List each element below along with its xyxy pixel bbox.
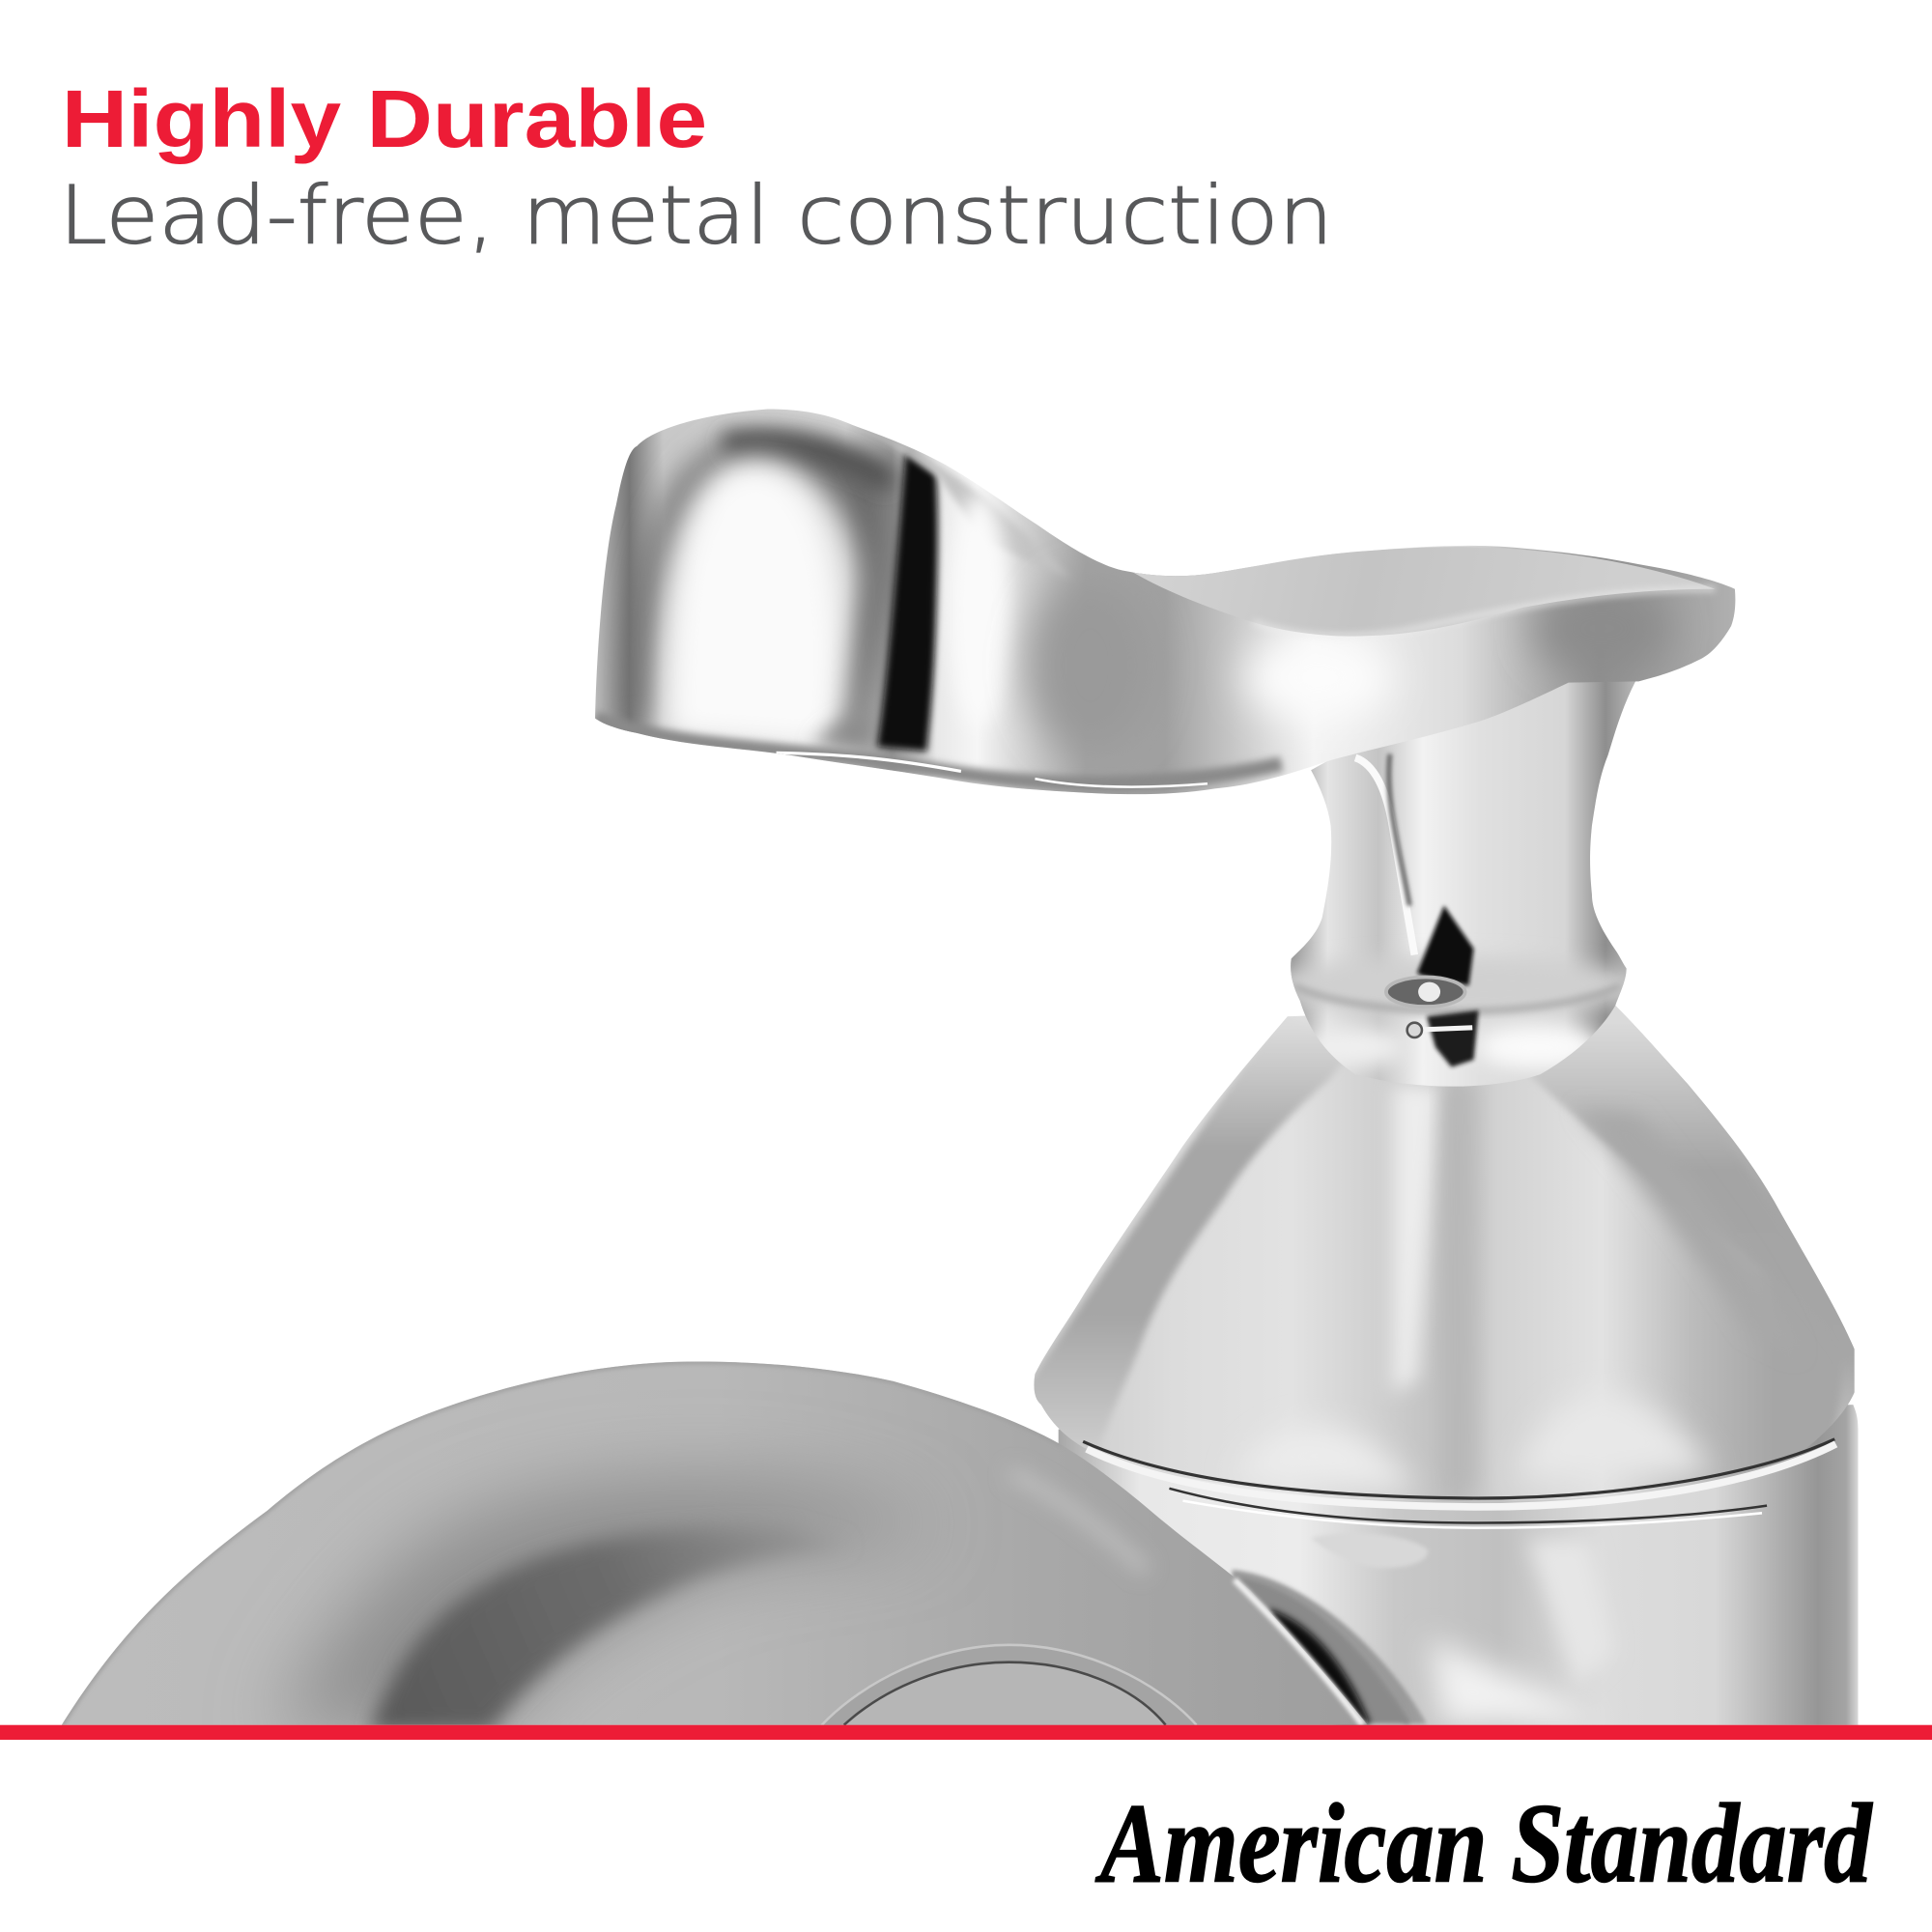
title: Highly Durable: Highly Durable [62,73,707,164]
faucet body cylinder [1059,1405,1858,1725]
spout aerator disc [822,1645,1197,1725]
ring detail reflection [1386,977,1472,1037]
handle lever [595,409,1735,794]
faucet handle cone [1023,992,1866,1528]
faucet photo illustration [62,409,1866,1731]
white footer band [0,1740,1932,1932]
chrome highlight along spout edge [1235,1579,1363,1725]
spout arc [62,1361,1368,1731]
handle neck stem [1269,675,1638,1087]
red divider bar [0,1725,1932,1740]
cone base ring [1083,1439,1836,1528]
subtitle: Lead-free, metal construction: Lead-free, metal construction [59,168,1333,262]
